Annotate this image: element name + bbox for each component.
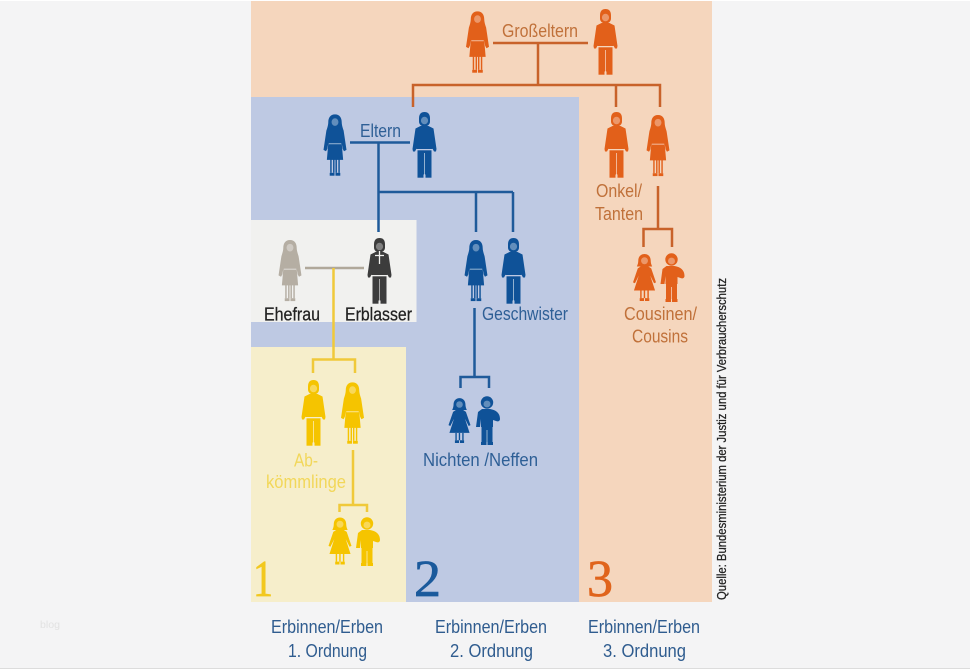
icon: daughter <box>341 382 364 444</box>
watermark: blog <box>40 620 60 631</box>
caption: third order: 3. Ordnung <box>603 641 686 661</box>
number 1: 1 <box>253 551 273 608</box>
connector: descendants to grandchildren <box>340 450 367 512</box>
group: Großeltern <box>413 9 660 107</box>
label: Nichten/Neffen: Nichten /Neffen <box>423 450 538 470</box>
caption: third order <box>588 617 700 661</box>
label: Ehefrau: Ehefrau <box>264 304 320 324</box>
connector: marriage <box>305 267 364 269</box>
icon: wife <box>279 240 301 301</box>
caption: first order <box>271 617 383 661</box>
connector: testator to descendants <box>313 268 355 373</box>
panel: testator, light grey <box>251 220 416 322</box>
icon: male cousin <box>660 253 684 302</box>
panel: third order, orange <box>251 1 712 602</box>
icon: grandson <box>356 517 380 566</box>
connector: siblings to nieces and nephews <box>460 308 489 388</box>
page top edge <box>0 0 970 1</box>
icon: father <box>412 112 436 178</box>
label: Tanten: Tanten <box>595 204 643 224</box>
caption: second order <box>435 617 547 661</box>
icon: grandmother <box>466 11 489 73</box>
label: Eltern: Eltern <box>360 121 401 141</box>
page bottom edge <box>0 668 970 669</box>
icon: brother <box>502 238 526 304</box>
icon: niece <box>448 398 470 443</box>
label: Erblasser: Erblasser <box>345 304 412 324</box>
icon: son <box>302 380 326 446</box>
icon: testator <box>368 238 392 304</box>
label: Cousinen/: Cousinen/ <box>624 304 697 324</box>
caption: first order: 1. Ordnung <box>288 641 367 661</box>
icon: sister <box>465 240 487 301</box>
icon: aunt <box>647 115 669 176</box>
panel: first order, yellow <box>251 347 406 602</box>
source note: Quelle: Bundesministerium der Justiz und für Verbraucherschutz <box>714 278 729 600</box>
caption: third order: Erbinnen/Erben <box>588 617 700 637</box>
label: Onkel/: Onkel/ <box>596 181 642 201</box>
number 2: 2 <box>414 551 441 608</box>
label: Ab-: Ab- <box>294 451 318 471</box>
connector: aunt to cousins <box>644 186 672 247</box>
icon: grandfather <box>594 9 618 75</box>
group: Cousinen/Cousins <box>624 253 697 346</box>
connector: grandparents <box>413 43 660 107</box>
number 3: 3 <box>587 551 613 608</box>
group: Abkömmlinge <box>266 268 380 566</box>
icon: female cousin <box>633 254 656 301</box>
caption: second order: 2. Ordnung <box>450 641 533 661</box>
label: Geschwister: Geschwister <box>482 304 568 324</box>
icon: granddaughter <box>328 518 352 564</box>
label: Großeltern: Großeltern <box>502 21 578 41</box>
icon: mother <box>324 114 346 176</box>
icon: uncle <box>604 112 628 178</box>
label: kömmlinge: kömmlinge <box>266 472 346 492</box>
label: Cousins: Cousins <box>632 326 688 346</box>
group: Onkel/Tanten <box>595 112 672 247</box>
group: Eltern <box>324 112 513 232</box>
icon: cross on testator <box>375 251 384 264</box>
group: Nichten/Neffen <box>423 396 538 470</box>
connector: parents <box>350 142 513 232</box>
caption: second order: Erbinnen/Erben <box>435 617 547 637</box>
group: Geschwister <box>460 238 568 388</box>
group: Ehefrau and Erblasser <box>264 238 412 324</box>
icon: nephew <box>476 396 500 445</box>
panel: second order, blue <box>251 97 579 602</box>
caption: first order: Erbinnen/Erben <box>271 617 383 637</box>
